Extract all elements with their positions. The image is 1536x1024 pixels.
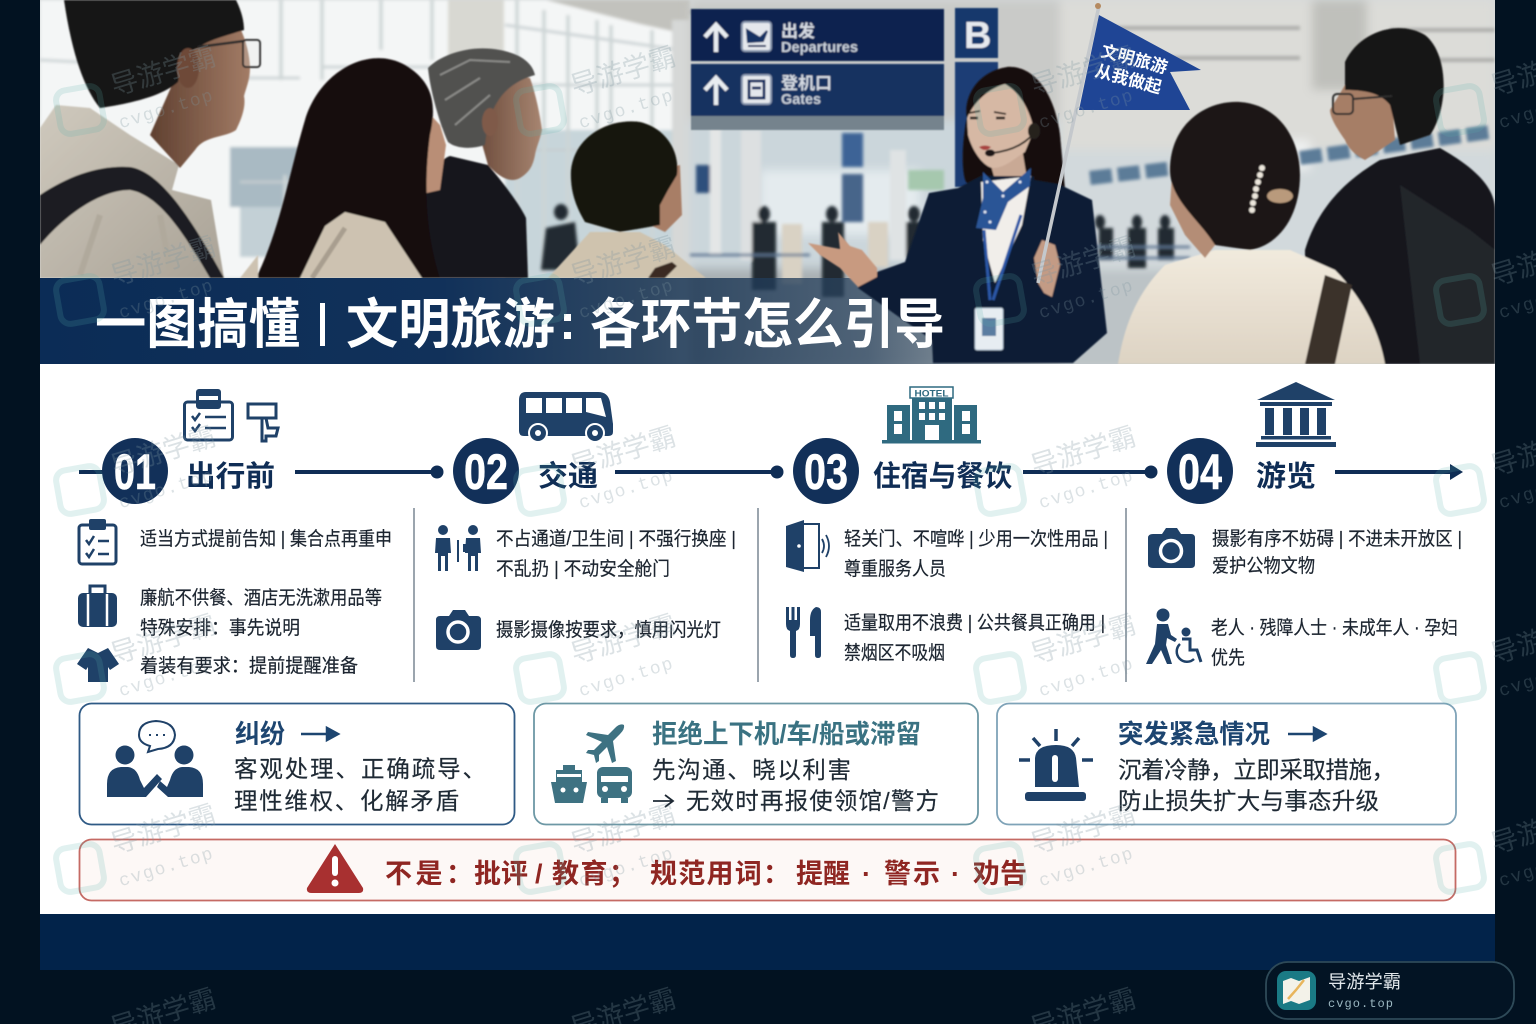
man with glasses and backpack <box>40 0 260 278</box>
tour group on the right <box>1118 28 1495 364</box>
red warning banner: 批评 <box>474 859 528 889</box>
column 4: sightseeing <box>1146 528 1462 669</box>
white content panel <box>40 364 1495 914</box>
footer brand badge: 导游学霸 <box>1328 972 1401 992</box>
timeline with four stages <box>79 438 1463 504</box>
repeating watermarks: 导游学霸 <box>567 421 679 482</box>
column dividers <box>414 508 1126 682</box>
icon: quiet door <box>786 520 829 572</box>
icon: alarm beacon <box>1019 729 1093 801</box>
icon: suitcase <box>78 586 117 627</box>
overhead sign: departures and gates: Departures <box>781 39 858 56</box>
icon: bus <box>519 392 613 442</box>
column 2: transport: 不乱扔 | 不动安全舱门 <box>496 558 670 580</box>
tour group on the left <box>40 0 706 278</box>
repeating watermarks: 导游学霸 <box>567 799 679 860</box>
repeating watermarks: cvgo.top <box>577 844 677 892</box>
repeating watermarks: cvgo.top <box>577 276 677 324</box>
icon: checklist and sign <box>184 389 278 441</box>
repeating watermarks: cvgo.top <box>1037 466 1137 514</box>
repeating watermarks: cvgo.top <box>117 466 217 514</box>
hero photo: airport terminal with tour group and guide <box>40 0 1495 370</box>
red warning banner: 提醒 <box>796 859 850 889</box>
red warning banner: · <box>862 859 871 889</box>
arrow <box>653 795 673 807</box>
red warning banner: · <box>951 859 960 889</box>
stage 01: 01 <box>114 444 156 500</box>
icon: map logo <box>1277 971 1316 1010</box>
terminal background <box>40 0 1495 370</box>
repeating watermarks: 导游学霸 <box>1027 231 1139 292</box>
red warning banner: 规范用词： <box>650 859 790 889</box>
footer brand badge: cvgo.top <box>1328 997 1393 1011</box>
red warning banner: / <box>535 859 543 889</box>
stage 04: 04 <box>1178 444 1222 500</box>
column 1: before departure <box>77 519 392 682</box>
tour guide with headset <box>808 67 1107 363</box>
column 4: sightseeing: 摄影有序不妨碍 | 不进未开放区 | <box>1212 528 1462 550</box>
bottom navy band <box>40 914 1495 970</box>
red warning banner: 劝告 <box>973 859 1027 889</box>
repeating watermarks: 导游学霸 <box>107 231 219 292</box>
icon: plane, ship and bus <box>551 724 632 803</box>
stage 01 <box>102 438 275 504</box>
overhead sign: departures and gates: B <box>964 15 991 57</box>
stage 02: 02 <box>464 444 508 500</box>
flag on a pole: 从我做起 <box>1093 62 1164 97</box>
icon: two people with divider <box>435 525 481 571</box>
woman with long hair <box>240 58 446 278</box>
repeating watermarks: cvgo.top <box>1037 86 1137 134</box>
stage 03: 住宿与餐饮 <box>873 460 1012 493</box>
repeating watermarks: 导游学霸 <box>107 799 219 860</box>
repeating watermarks: 导游学霸 <box>1027 799 1139 860</box>
column 1: before departure: 特殊安排：事先说明 <box>140 617 300 639</box>
column 3: lodging and dining: 轻关门、不喧哗 | 少用一次性用品 | <box>844 528 1108 550</box>
card: sudden emergencies <box>997 704 1456 824</box>
column 3: lodging and dining: 适量取用不浪费 | 公共餐具正确用 | <box>844 612 1105 634</box>
column 1: before departure: 适当方式提前告知 | 集合点再重申 <box>140 528 392 550</box>
column 2: transport: 不占通道/卫生间 | 不强行换座 | <box>496 528 736 550</box>
repeating watermarks: 导游学霸 <box>107 609 219 670</box>
repeating watermarks: cvgo.top <box>117 86 217 134</box>
repeating watermarks: cvgo.top <box>577 466 677 514</box>
repeating watermarks: 导游学霸 <box>1027 609 1139 670</box>
repeating watermarks: cvgo.top <box>577 86 677 134</box>
icon: warning triangle <box>307 844 363 893</box>
card: sudden emergencies: 沉着冷静，立即采取措施， <box>1118 757 1395 783</box>
column 1: before departure: 着装有要求：提前提醒准备 <box>140 655 358 677</box>
card: disputes: 理性维权、化解矛盾 <box>234 788 459 814</box>
repeating watermarks: 导游学霸 <box>1027 421 1139 482</box>
repeating watermarks: 导游学霸 <box>107 421 219 482</box>
footer brand badge <box>1266 962 1514 1019</box>
icon: hotel <box>882 387 981 444</box>
stage 03: 03 <box>804 444 848 500</box>
icon: museum <box>1256 382 1336 447</box>
red warning banner: 教育； <box>552 859 636 889</box>
card: refusal to board or stranded: 先沟通、晓以利害 <box>652 757 851 783</box>
repeating watermarks: 导游学霸 <box>567 41 679 102</box>
title <box>96 296 942 348</box>
repeating watermarks: cvgo.top <box>1037 654 1137 702</box>
older man <box>415 48 542 278</box>
repeating watermarks: 导游学霸 <box>107 41 219 102</box>
icon: camera <box>1148 528 1195 568</box>
overhead sign: departures and gates: 出发 <box>781 21 815 41</box>
overhead sign: departures and gates: 登机口 <box>781 74 832 93</box>
stage 02 <box>453 438 598 504</box>
column 4: sightseeing: 爱护公物文物 <box>1212 555 1315 577</box>
column 4: sightseeing: 老人 · 残障人士 · 未成年人 · 孕妇 <box>1211 617 1458 639</box>
title: 各环节怎么引导 <box>590 295 945 355</box>
repeating watermarks: cvgo.top <box>577 654 677 702</box>
flag on a pole: 文明旅游 <box>1099 41 1170 77</box>
column 2: transport <box>435 525 736 650</box>
column 3: lodging and dining <box>786 520 1108 664</box>
repeating watermarks: 导游学霸 <box>567 231 679 292</box>
stage 02: 交通 <box>538 460 598 493</box>
card: refusal to board or stranded <box>534 704 978 824</box>
red warning banner: 不是： <box>385 859 473 889</box>
icon: person assisting wheelchair user <box>1146 608 1201 664</box>
card: refusal to board or stranded: 拒绝上下机/车/船或滞留 <box>652 719 921 749</box>
column 3: lodging and dining: 尊重服务人员 <box>844 558 946 580</box>
red warning banner: 警示 <box>884 859 940 889</box>
card: disputes <box>80 704 514 824</box>
icon: t-shirt <box>77 648 119 682</box>
stage 04 <box>1167 438 1316 504</box>
repeating watermarks: cvgo.top <box>1037 276 1137 324</box>
red warning banner <box>80 840 1456 900</box>
repeating watermarks: 导游学霸 <box>567 609 679 670</box>
icon: hotel: HOTEL <box>914 388 949 398</box>
repeating watermarks: cvgo.top <box>117 276 217 324</box>
title band background <box>40 278 1050 364</box>
title: 一图搞懂 <box>95 295 300 355</box>
arrow <box>301 728 338 740</box>
icon: fork and knife <box>786 607 821 658</box>
stage 01: 出行前 <box>186 460 275 493</box>
card: disputes: 纠纷 <box>235 719 285 749</box>
column 2: transport: 摄影摄像按要求，慎用闪光灯 <box>496 619 721 641</box>
card: disputes: 客观处理、正确疏导、 <box>234 756 486 782</box>
stage 04: 游览 <box>1256 460 1316 493</box>
title: 文明旅游 <box>346 295 555 355</box>
stage 03 <box>793 438 1012 504</box>
card: refusal to board or stranded: 无效时再报使领馆/警方 <box>686 788 939 814</box>
card: sudden emergencies: 防止损失扩大与事态升级 <box>1118 788 1379 814</box>
repeating watermarks: cvgo.top <box>117 844 217 892</box>
icon: camera <box>436 610 481 650</box>
overhead sign: departures and gates <box>691 8 998 187</box>
column 1: before departure: 廉航不供餐、酒店无洗漱用品等 <box>140 587 382 609</box>
repeating watermarks: cvgo.top <box>117 654 217 702</box>
overhead sign: departures and gates: Gates <box>781 91 821 108</box>
arrow <box>1288 728 1325 740</box>
flag on a pole <box>1038 3 1201 283</box>
column 3: lodging and dining: 禁烟区不吸烟 <box>844 642 945 664</box>
repeating watermarks: 导游学霸 <box>1027 41 1139 102</box>
card: sudden emergencies: 突发紧急情况 <box>1118 719 1270 749</box>
repeating watermarks: cvgo.top <box>1037 844 1137 892</box>
icon: clipboard <box>79 519 116 564</box>
icon: two people talking <box>107 721 203 797</box>
column 4: sightseeing: 优先 <box>1211 647 1245 669</box>
person with short hair <box>548 121 706 278</box>
